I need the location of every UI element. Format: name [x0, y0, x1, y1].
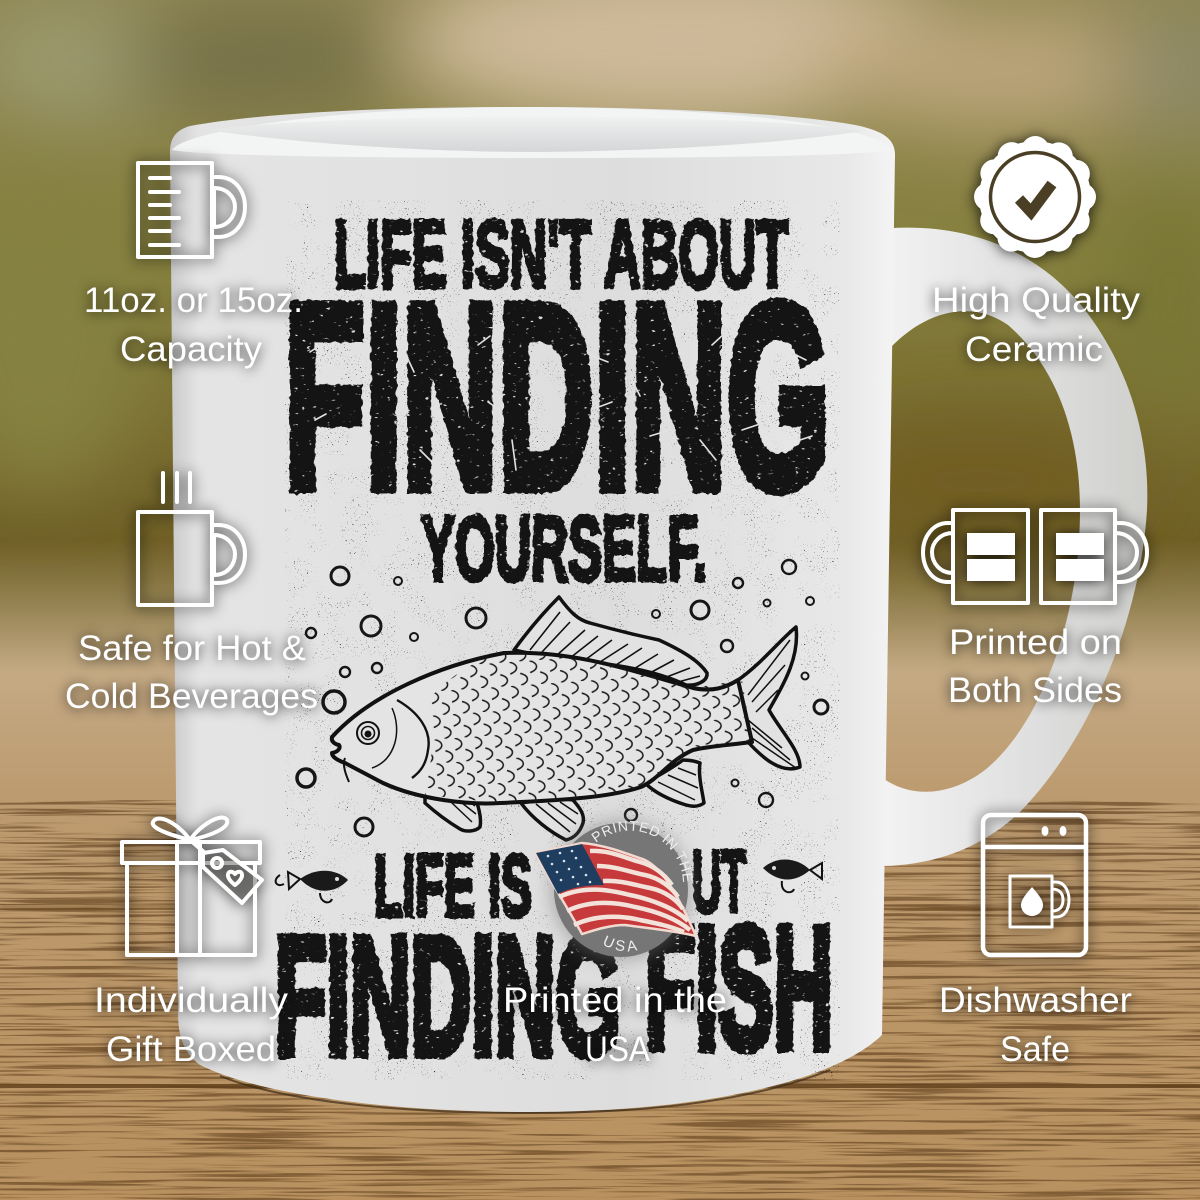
american flag	[535, 843, 696, 936]
lure left	[276, 871, 348, 902]
wooden table	[0, 800, 1200, 1200]
mug rim and opening	[172, 107, 893, 158]
label: high quality: Ceramic	[965, 330, 1103, 369]
label: both sides: Printed on	[949, 623, 1122, 662]
mug product infographic: FISH	[645, 890, 833, 1085]
ventral fin	[521, 799, 583, 840]
label: hot and cold: Safe for Hot &	[78, 629, 306, 668]
label: gift boxed	[94, 981, 289, 1069]
fish illustration	[332, 597, 800, 840]
label: dishwasher safe	[939, 981, 1132, 1069]
dorsal fin	[514, 597, 707, 685]
LIFE IS: LIFE IS	[374, 836, 532, 935]
label: capacity: 11oz. or 15oz.	[84, 281, 303, 320]
badge text top: PRINTED IN THE	[591, 820, 693, 882]
printed slogan	[275, 201, 833, 1090]
badge text bottom: USA	[604, 936, 638, 952]
label: printed in the USA: Printed in the	[503, 981, 727, 1020]
label: both sides: Both Sides	[948, 671, 1122, 710]
printed in the USA badge	[534, 812, 698, 968]
label: gift boxed: Individually	[94, 981, 289, 1020]
icon: dishwasher	[983, 815, 1086, 955]
label: high quality	[932, 281, 1141, 369]
mug shadow on table	[220, 1070, 830, 1113]
label: printed in the USA	[503, 981, 727, 1069]
LIFE ISN'T ABOUT: LIFE ISN'T ABOUT	[334, 201, 788, 308]
fish head details	[344, 700, 429, 782]
label: hot and cold	[65, 629, 318, 716]
pectoral fin	[425, 780, 481, 831]
bubbles	[297, 560, 828, 836]
label: capacity: Capacity	[120, 330, 263, 369]
label: high quality: High Quality	[932, 281, 1141, 320]
icon: gift box	[122, 818, 262, 955]
fish body	[332, 653, 752, 803]
label: hot and cold: Cold Beverages	[65, 677, 318, 716]
mug body	[170, 107, 895, 1112]
icon: high quality badge	[979, 141, 1091, 253]
mug handle	[880, 228, 1147, 866]
label: both sides	[948, 623, 1122, 710]
label: printed in the USA: USA	[585, 1030, 651, 1069]
distressed speckle texture	[285, 200, 840, 1080]
FINDING bottom: FINDING	[275, 902, 621, 1090]
tail fin	[738, 627, 800, 769]
label: dishwasher safe: Safe	[1000, 1030, 1070, 1069]
label: capacity	[84, 281, 303, 369]
icon: capacity mug	[138, 163, 245, 257]
printed slogan: UT	[692, 832, 746, 931]
YOURSELF.: YOURSELF.	[421, 498, 707, 600]
lure right	[763, 860, 822, 892]
label: gift boxed: Gift Boxed	[106, 1030, 276, 1069]
fish scales	[420, 650, 755, 810]
label: dishwasher safe: Dishwasher	[939, 981, 1132, 1020]
icon: hot and cold mug	[138, 473, 245, 605]
anal fin	[645, 760, 704, 806]
icon: printed both sides	[923, 510, 1147, 603]
